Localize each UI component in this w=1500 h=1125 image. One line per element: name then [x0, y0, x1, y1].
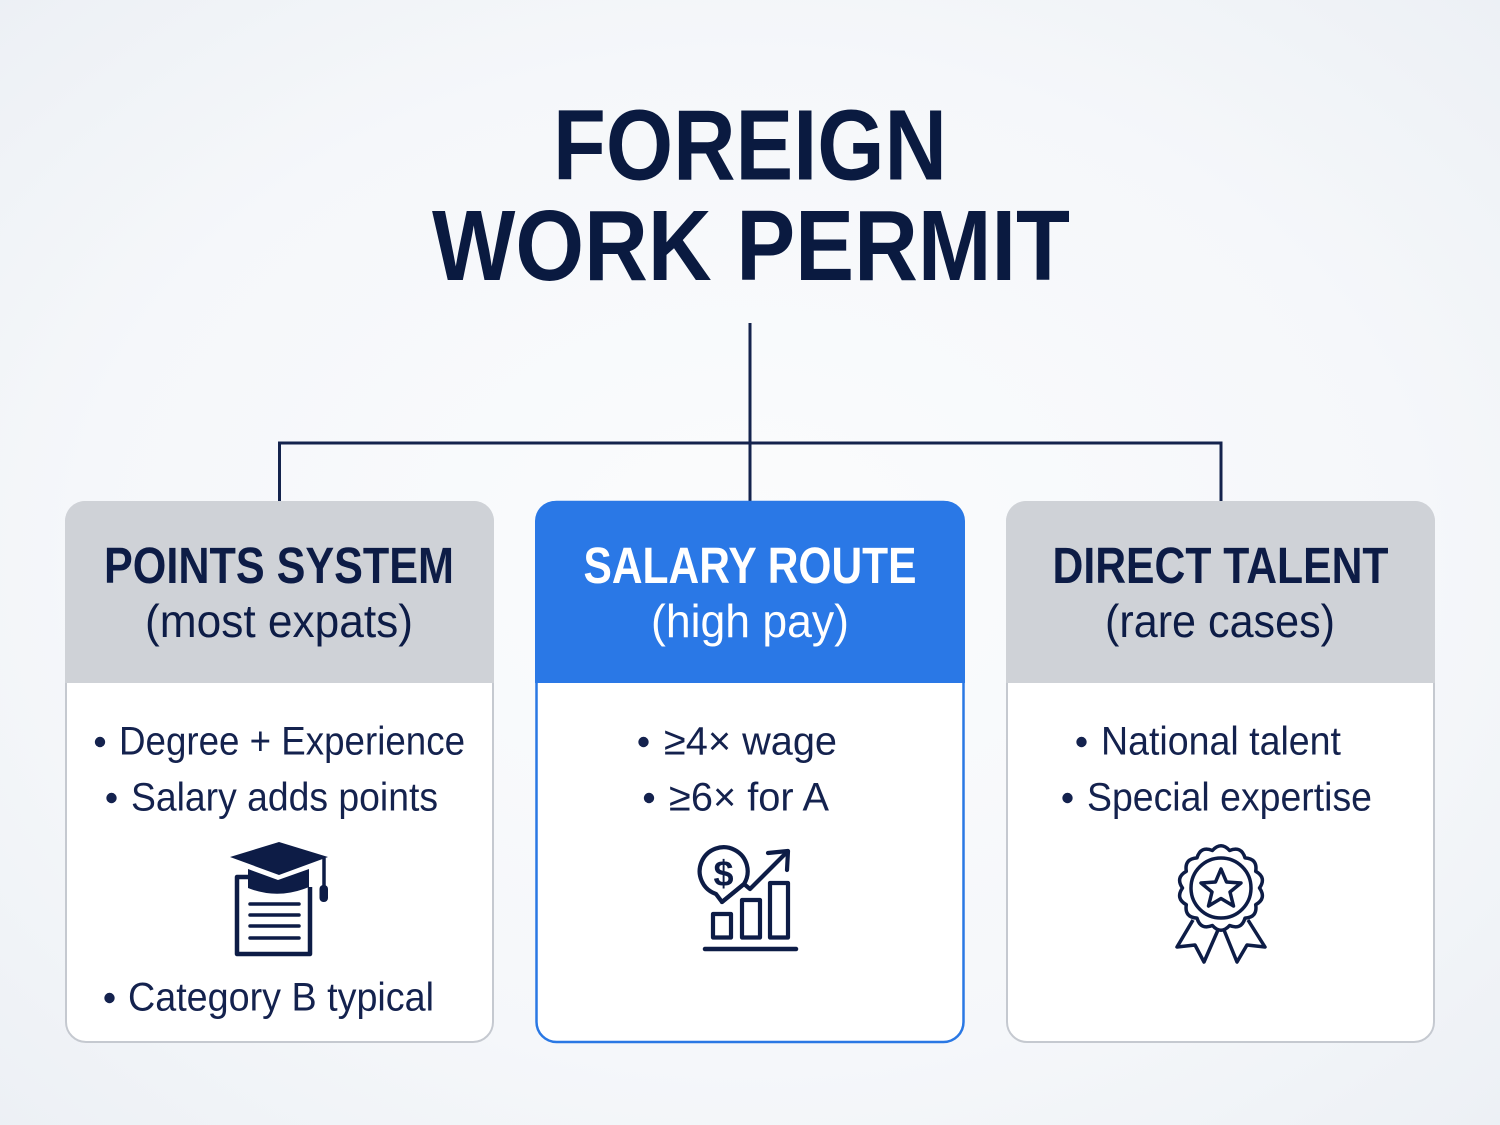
- heading: (high pay): [651, 595, 849, 647]
- card body: [1007, 502, 1434, 1042]
- card header: [535, 501, 965, 683]
- heading: POINTS SYSTEM: [104, 537, 454, 594]
- heading: (most expats): [145, 595, 413, 647]
- bullet list: ≥6× for A: [669, 776, 829, 820]
- panel: salary route: [535, 501, 965, 1042]
- card body: [536, 502, 964, 1042]
- bullet note: Category B typical: [128, 976, 434, 1020]
- panel: points system: [65, 501, 494, 1042]
- bullet list: Salary adds points: [131, 776, 438, 820]
- bullet list: [1062, 720, 1372, 820]
- heading: SALARY ROUTE: [584, 537, 916, 594]
- card body: [66, 502, 493, 1042]
- bullet list: National talent: [1101, 720, 1341, 764]
- title: [432, 90, 1070, 302]
- heading: (rare cases): [1105, 595, 1335, 647]
- heading: [584, 537, 916, 647]
- bullet list: ≥4× wage: [664, 720, 837, 764]
- bullet list: [638, 720, 837, 820]
- heading: [104, 537, 454, 647]
- heading: [1052, 537, 1388, 647]
- panel: direct talent: [1006, 501, 1435, 1042]
- icon: award rosette: [1177, 846, 1265, 962]
- bullet list: Degree + Experience: [119, 720, 465, 764]
- bullet list: [95, 720, 465, 820]
- icon: dollar and rising bars: [700, 847, 796, 949]
- card header: [65, 501, 494, 683]
- connector lines: [280, 323, 1221, 502]
- icon: dollar and rising bars: $: [713, 853, 734, 894]
- title: WORK PERMIT: [432, 190, 1070, 302]
- card header: [1006, 501, 1435, 683]
- title: FOREIGN: [553, 90, 947, 202]
- bullet list: Special expertise: [1087, 776, 1372, 820]
- icon: graduation cap and document: [230, 842, 328, 954]
- heading: DIRECT TALENT: [1052, 537, 1388, 594]
